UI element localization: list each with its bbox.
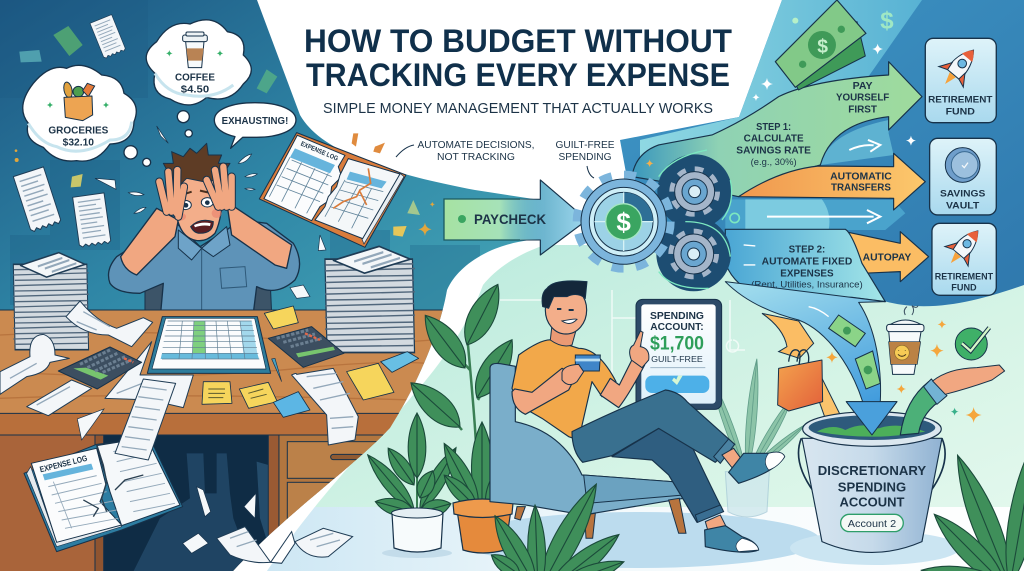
spending account tablet: ACCOUNT: <box>650 322 704 333</box>
coffee cup with smile <box>887 306 924 374</box>
credit card <box>575 355 600 371</box>
check badge <box>955 328 989 360</box>
paycheck bill label: PAYCHECK <box>474 212 546 227</box>
icon: grocery bag <box>62 81 95 121</box>
shopping bag <box>778 350 823 411</box>
orange flow arrow to bucket <box>762 313 850 437</box>
calm scene <box>490 281 1005 552</box>
spending account tablet <box>636 299 722 409</box>
paycheck arrow <box>489 180 587 255</box>
main gear: $ <box>616 207 631 237</box>
card: retirement fund: RETIREMENT <box>928 95 993 105</box>
lower small gear <box>656 217 731 291</box>
foreground plants <box>486 435 1024 571</box>
neck and head <box>550 325 577 346</box>
sparkles and flying shards <box>95 126 326 251</box>
shirt collar <box>178 227 230 260</box>
spending account tablet: SPENDING <box>650 311 704 322</box>
background: floor <box>230 507 1024 571</box>
arms <box>121 202 292 275</box>
thought bubble: groceries <box>23 65 151 166</box>
main gear <box>577 175 670 268</box>
annotation: automate decisions: AUTOMATE DECISIONS, <box>418 139 534 151</box>
cash bill on top: $ <box>817 37 828 58</box>
armchair <box>490 363 686 538</box>
plant: bottom center <box>486 478 627 571</box>
pointing arm <box>600 358 645 408</box>
icon: rocket <box>933 40 986 94</box>
receipts on the floor <box>217 527 353 563</box>
thought bubble: coffee <box>146 20 251 137</box>
paper stack: right <box>325 246 415 352</box>
plant: bottom right <box>919 435 1024 571</box>
discretionary spending bucket: DISCRETIONARY <box>818 464 927 478</box>
card: savings vault: SAVINGS <box>940 189 985 199</box>
calculator left <box>58 347 142 389</box>
annotation: automate decisions: NOT TRACKING <box>437 151 515 163</box>
spending account tablet: $1,700 <box>650 333 704 354</box>
speech bubble: exhausting <box>214 103 296 148</box>
green arrow: pay yourself first: PAY <box>853 81 873 92</box>
plant: tall leafy <box>403 279 523 505</box>
step 2 panel: AUTOMATE FIXED <box>762 257 852 268</box>
card: savings vault <box>930 138 996 215</box>
desk items <box>0 246 419 563</box>
annotation: guilt-free spending: SPENDING <box>558 151 612 163</box>
legs <box>133 453 253 571</box>
thought bubble: groceries: $32.10 <box>63 137 94 148</box>
background: office silhouettes <box>10 160 480 314</box>
floating receipts <box>13 15 126 247</box>
green arrow: pay yourself first: YOURSELF <box>836 93 889 104</box>
light channel behind green arrow <box>820 120 894 167</box>
icon: coin vault <box>945 148 980 182</box>
flow diagram <box>489 0 996 302</box>
pen <box>272 358 282 382</box>
step 2 panel: EXPENSES <box>780 269 834 280</box>
thought bubble: coffee: $4.50 <box>181 85 209 96</box>
speech bubble: exhausting: EXHAUSTING! <box>222 116 288 127</box>
spreadsheet tablet <box>147 317 271 373</box>
paper stack: left <box>13 253 89 350</box>
discretionary spending bucket <box>798 412 945 552</box>
upper small gear <box>657 150 732 229</box>
drawers <box>94 434 384 571</box>
sticky notes <box>202 306 419 417</box>
background: stressed side panel <box>0 0 540 571</box>
desk body <box>0 432 386 571</box>
decorative dollar and sparkles: $ <box>880 7 894 34</box>
subtitle: SIMPLE MONEY MANAGEMENT THAT ACTUALLY WORKS <box>323 100 713 117</box>
hands <box>159 167 232 217</box>
knee space <box>103 435 268 571</box>
green arrow: pay yourself first: FIRST <box>848 104 877 115</box>
thought bubble: groceries: GROCERIES <box>48 125 109 136</box>
plant: orange pot <box>436 422 527 553</box>
card: retirement fund second <box>932 221 996 295</box>
blue flow arrow to bucket <box>725 282 897 435</box>
face <box>174 191 222 233</box>
step 2 panel: STEP 2: <box>789 245 825 256</box>
person relaxing <box>512 281 785 552</box>
small ring and sparkle <box>646 159 739 223</box>
card: savings vault: VAULT <box>946 200 980 210</box>
background: calm side panel <box>267 245 1024 571</box>
green arrow: pay yourself first <box>632 62 922 197</box>
icons: green sparkles <box>166 50 223 57</box>
discretionary spending bucket: SPENDING <box>838 481 906 495</box>
head <box>175 172 223 241</box>
stressed scene decorations <box>13 15 435 251</box>
card: retirement fund second: FUND <box>951 283 977 293</box>
stressed man <box>108 143 300 313</box>
calculator right <box>268 327 344 367</box>
torn expense log book: EXPENSE LOG <box>299 141 339 163</box>
background: light diagonal band <box>640 0 922 175</box>
open expense log book <box>24 438 183 552</box>
floating cash <box>19 26 277 187</box>
green arrow: pay yourself first: (e.g., 30%) <box>751 157 797 167</box>
spending account tablet: GUILT-FREE <box>651 354 703 364</box>
upper leg <box>572 390 735 462</box>
discretionary spending bucket: Account 2 <box>848 519 896 530</box>
shirt <box>512 340 616 440</box>
paycheck bill label <box>444 199 546 240</box>
hair <box>163 143 230 188</box>
background: glass wall lines <box>500 290 745 395</box>
thought bubble: coffee: COFFEE <box>175 73 216 84</box>
step 2 panel <box>725 229 885 302</box>
upper shoe <box>729 452 785 483</box>
plant: white pot <box>362 413 463 558</box>
main title: HOW TO BUDGET WITHOUT <box>304 23 732 59</box>
blue arrow tip over bucket <box>846 402 897 435</box>
orange arrow: automatic transfers: AUTOMATIC <box>830 171 892 182</box>
curled receipts <box>0 301 358 445</box>
cash bill on top <box>775 0 866 90</box>
orange arrow: autopay: AUTOPAY <box>863 253 912 264</box>
plant in glass vase <box>700 358 808 517</box>
torn paper shards <box>77 285 310 553</box>
plants <box>362 279 527 558</box>
orange arrow: autopay <box>845 232 929 282</box>
icon: coffee cup <box>183 32 207 68</box>
green arrow: pay yourself first: STEP 1: <box>756 122 791 133</box>
card: retirement fund <box>925 38 996 123</box>
icon: rocket <box>939 221 989 273</box>
arm with open hand <box>900 365 1005 435</box>
cash on arrow <box>829 315 880 389</box>
lower leg <box>612 428 723 522</box>
middle band with white arrow <box>725 140 905 230</box>
icons: green sparkles <box>47 102 109 108</box>
open expense log book: EXPENSE LOG <box>39 453 88 474</box>
main title: TRACKING EVERY EXPENSE <box>306 57 730 93</box>
step 2 panel: (Rent, Utilities, Insurance) <box>751 279 863 289</box>
receipt hanging over desk <box>115 379 176 460</box>
torn expense log book <box>259 133 406 247</box>
annotation: guilt-free spending: GUILT-FREE <box>556 139 614 151</box>
card: retirement fund: FUND <box>946 106 975 116</box>
arm with card <box>512 368 576 414</box>
discretionary spending bucket: ACCOUNT <box>839 496 905 510</box>
green arrow: pay yourself first: SAVINGS RATE <box>736 145 812 156</box>
green arrow: pay yourself first: CALCULATE <box>744 134 804 145</box>
sparkles <box>826 320 982 423</box>
orange arrow: automatic transfers <box>739 153 925 210</box>
desk <box>0 310 467 571</box>
annotation: automate decisions <box>396 139 534 163</box>
orange arrow: automatic transfers: TRANSFERS <box>831 183 892 194</box>
shirt <box>108 220 300 313</box>
main title <box>304 23 732 93</box>
decorative dollar and sparkles <box>752 7 916 146</box>
desk top <box>0 310 467 414</box>
office chair back <box>145 260 272 313</box>
background: blue flow panel <box>620 0 1024 306</box>
lower shoe <box>705 526 759 552</box>
card: retirement fund second: RETIREMENT <box>935 271 994 281</box>
annotation: guilt-free spending <box>556 139 614 178</box>
